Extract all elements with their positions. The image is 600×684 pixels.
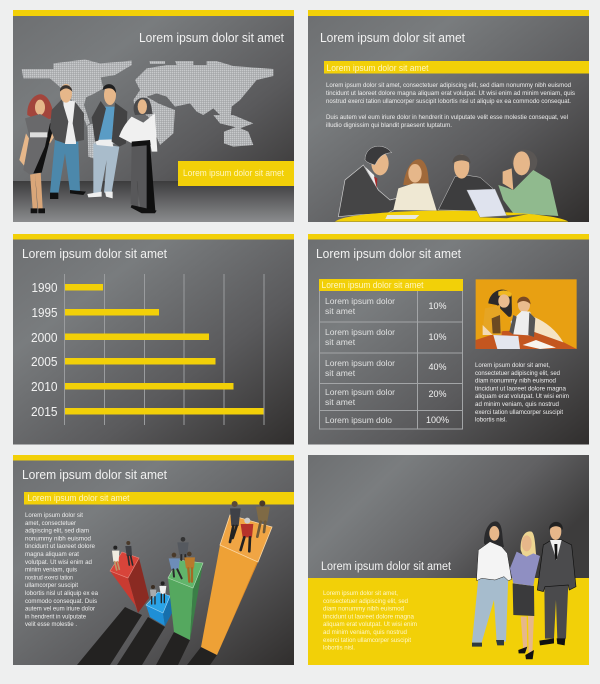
body text: autem vel eum iriure dolor: [25, 606, 96, 613]
body text: ad minim veniam, quis nostrud: [475, 401, 559, 408]
data table: 10%: [428, 301, 447, 311]
woman in green jacket: [498, 150, 558, 216]
subheading bar: Lorem ipsum dolor sit amet: [28, 493, 130, 503]
data table: 10%: [428, 332, 447, 342]
heading: Lorem ipsum dolor sit amet: [316, 246, 461, 261]
people: three business figures: [472, 521, 576, 659]
body text: [323, 590, 417, 652]
body text: exerci tation ullamcorper suscipit: [475, 409, 563, 416]
body text: velit esse molestie .: [25, 621, 77, 628]
bar chart: 2005: [31, 355, 58, 369]
panel: table slide: [308, 234, 589, 444]
shadows of bars: [77, 607, 217, 665]
data table: sit amet: [325, 306, 356, 316]
body text: ullamcorper suscipit: [25, 582, 78, 589]
3D bar: orange: [201, 515, 272, 655]
heading: Lorem ipsum dolor sit amet: [321, 561, 452, 573]
woman in cream jacket: [393, 159, 437, 211]
callout: yellow box: [178, 161, 294, 186]
papers: [385, 215, 419, 219]
body text: Lorem ipsum dolor sit amet, consectetuer adipiscing elit, sed diam nonummy nibh euismod: [326, 82, 571, 89]
data table: Lorem ipsum dolor: [325, 327, 395, 337]
3D bar: red: [110, 552, 149, 613]
table: [335, 211, 568, 222]
body text: nonummy nibh euismod: [25, 535, 91, 542]
body text: tincidunt ut laoreet dolore magna aliquam erat volutpat. Ut wisi enim ad minim veniam, quis: [326, 90, 575, 97]
body text: tincidunt ut laoreet dolore: [25, 543, 95, 550]
floor: [13, 181, 294, 222]
man in blue sweater: [87, 84, 127, 198]
body text: in hendrerit in vulputate: [25, 613, 86, 620]
heading: Lorem ipsum dolor sit amet: [22, 467, 167, 482]
data table: sit amet: [325, 397, 356, 407]
data table: Lorem ipsum dolo: [325, 415, 392, 425]
subheading bar: [24, 492, 294, 504]
illustration: two people at laptop: [476, 279, 577, 349]
data table: Lorem ipsum dolor sit amet: [322, 280, 424, 290]
man presenting: [338, 146, 403, 217]
people: four business figures: [19, 84, 157, 213]
body text: diam nonummy nibh euismod: [475, 378, 556, 385]
body text: [25, 512, 98, 628]
data table: Lorem ipsum dolor: [325, 358, 395, 368]
bar chart: 2015: [31, 405, 58, 419]
small people on the bars: [112, 500, 270, 604]
body text: Lorem ipsum dolor sit: [25, 512, 83, 519]
body text: Lorem ipsum dolor sit amet,: [475, 362, 550, 369]
body text: diam nonummy nibh euismod: [323, 606, 404, 613]
body text: ad minim veniam, quis nostrud: [323, 629, 407, 636]
data table: sit amet: [325, 337, 356, 347]
heading: Lorem ipsum dolor sit amet: [22, 246, 167, 261]
bar chart: [31, 274, 264, 425]
body text: aliquam erat volutpat. Ut wisi enim: [323, 621, 417, 628]
body text: amet, consectetuer: [25, 520, 77, 527]
bar chart: 1995: [32, 306, 58, 320]
data table: Lorem ipsum dolor: [325, 296, 395, 306]
body text: illudio dignissim qui blandit praesent luptatum.: [326, 122, 452, 129]
woman in lilac jacket: [510, 531, 540, 659]
panel: world map slide: [13, 10, 294, 222]
body text: nostrud exerci tation ullamcorper suscipit lobortis nisl ut aliquip ex ea commodo consequat.: [326, 98, 571, 105]
body text: commodo consequat. Duis: [25, 598, 97, 605]
data table: 40%: [428, 362, 447, 372]
body text: consectetuer adipiscing elit, sed: [323, 598, 408, 605]
3D bar: green: [168, 560, 203, 640]
woman in grey dress: [19, 94, 57, 213]
callout: yellow box: Lorem ipsum dolor sit amet: [183, 168, 284, 178]
body text: nostrud exerci tation: [25, 574, 73, 581]
data table: sit amet: [325, 368, 356, 378]
bar chart: 1990: [32, 281, 58, 295]
man in dark suit: [537, 522, 576, 645]
panel: closing slide: [308, 455, 589, 665]
body text: tincidunt ut laoreet dolore magna: [323, 613, 414, 620]
body text: consectetuer adipiscing elit, sed: [475, 370, 560, 377]
body text: aliquam erat volutpat. Ut wisi enim: [475, 393, 569, 400]
illustration: business meeting: [335, 146, 568, 222]
body text: volutpat. Ut wisi enim ad: [25, 559, 92, 566]
body text: lobortis nisl.: [323, 645, 355, 652]
panel: 3D bars slide: [13, 455, 294, 665]
panel: meeting slide: [308, 10, 589, 222]
laptop: [467, 189, 528, 218]
body text: Lorem ipsum dolor sit amet,: [323, 590, 398, 597]
body text: lobortis nisl.: [475, 417, 507, 424]
panel: bar chart slide: [13, 234, 294, 444]
data table: 20%: [428, 389, 447, 399]
man from behind: [438, 155, 493, 211]
body text: adipiscing elit, sed diam: [25, 528, 89, 535]
heading: Lorem ipsum dolor sit amet: [320, 30, 465, 45]
data table: Lorem ipsum dolor: [325, 387, 395, 397]
body text: magna aliquam erat: [25, 551, 79, 558]
body text: lobortis nisl ut aliquip ex ea: [25, 590, 98, 597]
3D bar: blue: [146, 592, 172, 626]
man in blazer and jeans: [50, 84, 86, 199]
body text: exerci tation ullamcorper suscipit: [323, 637, 411, 644]
subheading bar: [324, 61, 589, 74]
body text: Duis autem vel eum iriure dolor in hendrerit in vulputate velit esse molestie consequat, vel: [326, 114, 568, 121]
woman in white shirt: [472, 521, 512, 647]
data table: [319, 279, 463, 429]
body text: [326, 82, 575, 129]
body text: tincidunt ut laoreet dolore magna: [475, 385, 566, 392]
heading: Lorem ipsum dolor sit amet: [139, 30, 284, 45]
body text: minim veniam, quis: [25, 567, 77, 574]
bar chart: 2000: [31, 331, 58, 345]
body text: [475, 362, 569, 424]
data table: 100%: [426, 415, 449, 425]
subheading bar: Lorem ipsum dolor sit amet: [326, 63, 429, 73]
dotted world map: [22, 59, 273, 158]
woman in white blouse: [119, 98, 157, 213]
bar chart: 2010: [31, 380, 58, 394]
